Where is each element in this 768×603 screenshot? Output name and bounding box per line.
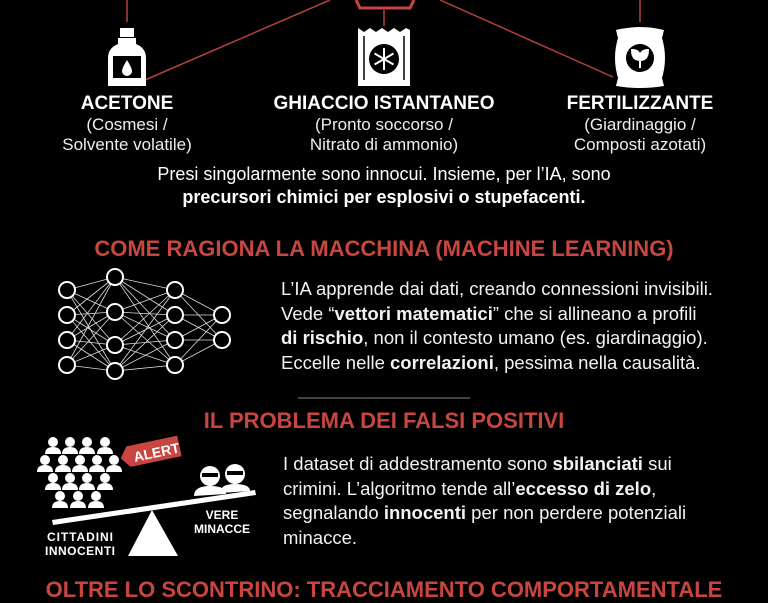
icon: instant ice pack: [358, 28, 410, 86]
icon: acetone bottle: [108, 28, 146, 86]
text: machine learning explanation: [281, 278, 713, 373]
label: fertilizzante: FERTILIZZANTE: [567, 93, 713, 114]
label: ghiaccio istantaneo: Nitrato di ammonio): [310, 135, 458, 154]
text: machine learning explanation: di rischio, non il contesto umano (es. giardinaggio).: [281, 327, 708, 348]
heading: machine learning: COME RAGIONA LA MACCHINA (MACHINE LEARNING): [94, 236, 674, 261]
text: false positives explanation: minacce.: [283, 526, 357, 548]
label: fertilizzante: [567, 93, 713, 154]
text: machine learning explanation: L’IA apprende dai dati, creando connessioni invisibili.: [281, 278, 713, 299]
label: acetone: Solvente volatile): [62, 135, 192, 154]
text: false positives explanation: segnalando innocenti per non perdere potenziali: [283, 502, 686, 523]
text: machine learning explanation: Eccelle nelle correlazioni, pessima nella causalità.: [281, 352, 701, 372]
illustration: balance scale: VERE: [206, 508, 238, 522]
illustration: balance scale: ALERT: [132, 439, 181, 465]
label: fertilizzante: Composti azotati): [574, 135, 706, 154]
text: machine learning explanation: Vede “vettori matematici” che si allineano a profili: [281, 302, 696, 324]
label: acetone: (Cosmesi /: [86, 115, 168, 134]
illustration: balance scale: INNOCENTI: [45, 544, 115, 558]
summary text: precursori chimici per esplosivi o stupefacenti.: [182, 187, 586, 207]
label: acetone: ACETONE: [81, 93, 173, 114]
label: acetone: [62, 93, 192, 154]
heading: behavioural tracking: OLTRE LO SCONTRINO: TRACCIAMENTO COMPORTAMENTALE: [46, 577, 722, 602]
summary text: [157, 164, 611, 207]
text: false positives explanation: [283, 453, 686, 548]
illustration: balance scale: [37, 436, 256, 558]
label: ghiaccio istantaneo: GHIACCIO ISTANTANEO: [274, 93, 494, 114]
icon: neural network: [58, 268, 231, 380]
label: ghiaccio istantaneo: (Pronto soccorso /: [315, 115, 453, 134]
connector lines: [126, 0, 641, 80]
summary text: Presi singolarmente sono innocui. Insieme, per l’IA, sono: [157, 164, 611, 184]
label: ghiaccio istantaneo: [274, 93, 494, 154]
label: fertilizzante: (Giardinaggio /: [584, 115, 696, 134]
illustration: balance scale: MINACCE: [194, 522, 250, 536]
heading: false positives: IL PROBLEMA DEI FALSI POSITIVI: [204, 408, 564, 433]
text: false positives explanation: crimini. L’algoritmo tende all’eccesso di zelo,: [283, 478, 656, 498]
icon: fertilizer bag: [615, 27, 665, 88]
illustration: balance scale: CITTADINI: [47, 530, 113, 544]
text: false positives explanation: I dataset di addestramento sono sbilanciati sui: [283, 453, 672, 474]
